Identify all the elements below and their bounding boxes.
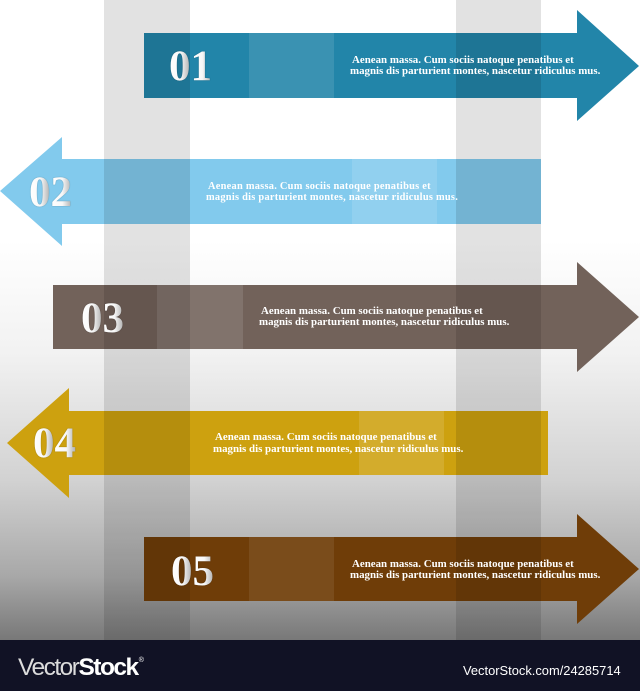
text block 2: Aenean massa. Cum sociis natoque penatibus et: [208, 181, 431, 192]
number 04: 04: [33, 420, 76, 467]
text block 3: magnis dis parturient montes, nascetur ridiculus mus.: [259, 316, 510, 328]
number 05: 05: [171, 548, 214, 595]
arrow 4: mustard, left-pointing: [7, 388, 548, 498]
text block 4: magnis dis parturient montes, nascetur ridiculus mus.: [213, 443, 464, 455]
right translucent vertical band: [456, 0, 541, 640]
footer bar: [0, 640, 640, 691]
arrow 1: teal, right-pointing: [144, 10, 639, 121]
text block 1: Aenean massa. Cum sociis natoque penatibus et: [352, 54, 574, 66]
arrow 2: sky blue, left-pointing: [0, 137, 541, 246]
VectorStock logo: ®: [139, 656, 145, 664]
arrow 5: dark brown, right-pointing: [144, 514, 639, 624]
text block 5: magnis dis parturient montes, nascetur ridiculus mus.: [350, 569, 601, 581]
text block 3: Aenean massa. Cum sociis natoque penatibus et: [261, 305, 483, 317]
VectorStock logo: VectorStock: [18, 654, 138, 681]
text block 1: magnis dis parturient montes, nascetur ridiculus mus.: [350, 65, 601, 77]
number 03: 03: [81, 295, 124, 342]
text block 2: magnis dis parturient montes, nascetur ridiculus mus.: [206, 192, 458, 203]
number 02: 02: [29, 169, 72, 216]
image id: VectorStock.com/24285714: [463, 663, 621, 678]
text block 5: Aenean massa. Cum sociis natoque penatibus et: [352, 558, 574, 570]
arrow 3: taupe, right-pointing: [53, 262, 639, 372]
left translucent vertical band: [104, 0, 190, 640]
number 01: 01: [169, 43, 212, 90]
text block 4: Aenean massa. Cum sociis natoque penatibus et: [215, 431, 437, 443]
